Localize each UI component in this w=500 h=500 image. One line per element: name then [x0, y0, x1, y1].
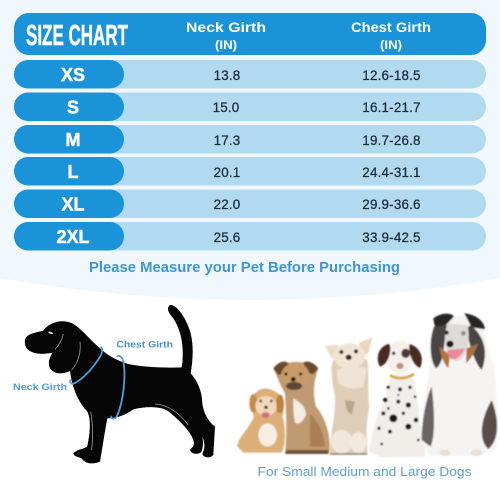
table row: XS: 13.8 — [214, 68, 240, 83]
panel: table header — [14, 13, 486, 55]
photo: group of five dogs — [237, 313, 498, 457]
label: neck girth: Neck Girth — [13, 382, 67, 392]
table row: 2XL: 33.9-42.5 — [362, 230, 421, 245]
table row: L: 24.4-31.1 — [362, 165, 421, 180]
column unit: neck: (IN) — [215, 38, 237, 52]
table row: S: 16.1-21.7 — [362, 100, 421, 115]
column unit: chest: (IN) — [380, 38, 402, 52]
table row: XS: 12.6-18.5 — [362, 68, 421, 83]
table row: M: M — [66, 130, 80, 150]
table row: L: L — [68, 162, 78, 182]
table row: XL: 29.9-36.6 — [362, 197, 421, 212]
table row: 2XL — [14, 222, 486, 250]
table row: M: 19.7-26.8 — [362, 133, 421, 148]
white fur lines — [55, 334, 188, 450]
table row: S — [14, 92, 486, 121]
label: chest girth: Chest Girth — [116, 340, 173, 350]
table row: S: 15.0 — [213, 100, 239, 115]
icon: eye — [48, 332, 53, 334]
table row: XL: 22.0 — [214, 197, 240, 212]
table row: XL: XL — [61, 194, 85, 214]
heading: size chart: SIZE CHART — [26, 20, 128, 52]
neck girth line — [70, 347, 102, 384]
dog 1: small fluffy puppy — [237, 389, 285, 453]
table row: S: S — [67, 98, 79, 118]
column heading: neck girth: Neck Girth — [186, 19, 266, 35]
dog 5: australian shepherd — [421, 313, 498, 456]
caption: for small medium and large dogs: For Small Medium and Large Dogs — [258, 464, 472, 479]
table row: XL — [14, 190, 486, 218]
diagram: dog silhouette with girth lines — [13, 305, 215, 463]
table row: M: 17.3 — [214, 133, 240, 148]
table row: L: 20.1 — [214, 165, 240, 180]
table row: 2XL: 25.6 — [214, 230, 240, 245]
table row: XS — [14, 60, 486, 88]
icon: black dog silhouette — [25, 305, 215, 463]
table row: 2XL: 2XL — [56, 227, 90, 247]
column heading: chest girth: Chest Girth — [351, 19, 431, 35]
dog 4: dalmatian puppy — [369, 341, 425, 457]
background: pale blue curved panel — [0, 0, 500, 300]
dog 2: tan terrier mix — [273, 361, 330, 454]
table row: XS: XS — [61, 65, 85, 85]
table row: M — [14, 125, 486, 154]
measuring note: Please Measure your Pet Before Purchasing — [89, 260, 400, 276]
dog 3: cream chihuahua — [325, 337, 372, 455]
table row: L — [14, 157, 486, 186]
chest girth line — [111, 356, 124, 419]
